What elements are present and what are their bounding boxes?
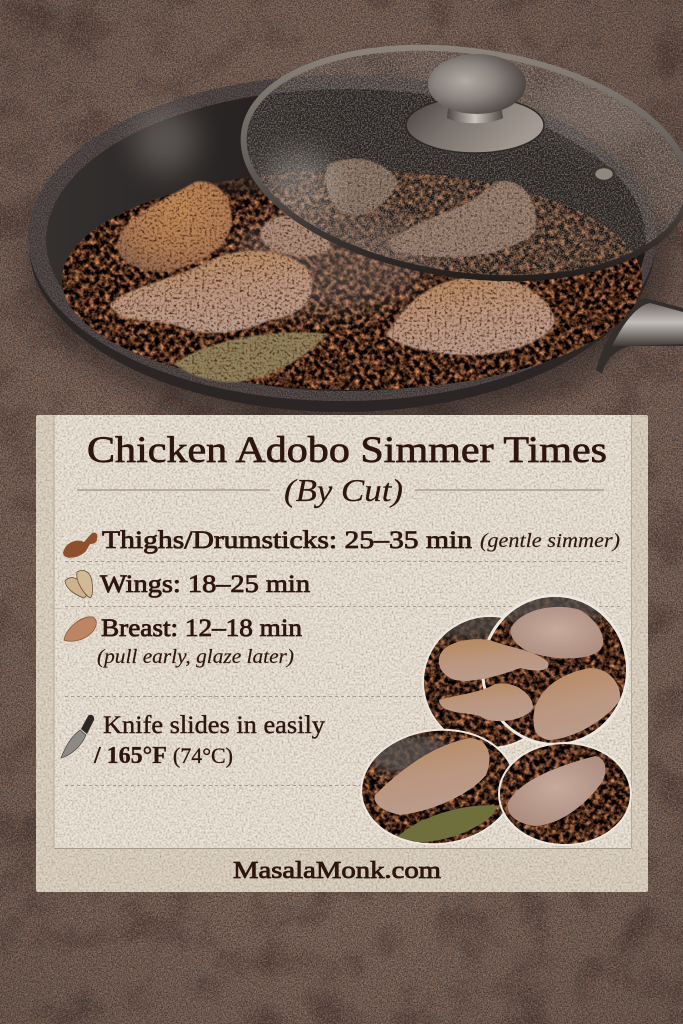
title: Chicken Adobo Simmer Times: [87, 430, 607, 471]
photo piece: upper thigh: [511, 607, 603, 658]
breast piece: [508, 756, 605, 826]
lid rim: [229, 21, 683, 305]
row: thighs and drumsticks: (gentle simmer): [480, 531, 620, 552]
pan handle: [596, 298, 683, 374]
card outer panel: [36, 415, 648, 892]
glass lid: [240, 44, 683, 282]
subtitle with rules: (By Cut): [284, 472, 403, 508]
row: doneness check: Knife slides in easily: [103, 712, 326, 739]
row: breast: [64, 613, 302, 668]
chicken drumstick centre left: [110, 251, 312, 333]
row: breast: (pull early, glaze later): [97, 647, 294, 668]
photo: drumstick and wing pieces: [439, 639, 620, 740]
row: thighs and drumsticks: Thighs/Drumsticks: 25–35 min: [102, 525, 472, 554]
large thigh: [533, 668, 620, 740]
icon: knife: [61, 715, 94, 758]
row: doneness check: [61, 712, 326, 769]
bay leaf: [396, 805, 498, 842]
website credit: MasalaMonk.com: [233, 858, 441, 884]
chicken under lid: [389, 181, 536, 257]
chicken thigh right: [386, 277, 555, 355]
lid knob cap: [428, 54, 526, 114]
lid knob base: [406, 97, 544, 153]
photo: bottom right oval: [498, 742, 632, 846]
frying pan: [28, 75, 683, 434]
row: doneness check: / 165°F (74°C): [93, 743, 233, 769]
recipe card: [36, 415, 648, 892]
roll of chicken: [375, 738, 489, 815]
card inner panel: [54, 415, 631, 848]
photo: left circle drumstick: [422, 615, 524, 748]
bay leaf: [174, 332, 328, 382]
lid vent: [594, 167, 614, 181]
row: thighs and drumsticks: [63, 525, 620, 558]
row: breast: Breast: 12–18 min: [101, 613, 302, 642]
chicken thigh left: [117, 181, 232, 272]
sauce surface: [60, 162, 650, 395]
chicken piece behind: [261, 216, 330, 256]
wing: [439, 683, 533, 721]
icon: chicken breast: [64, 617, 96, 641]
photo: bottom left oval: [360, 728, 511, 846]
lid knob neck: [447, 98, 503, 123]
photo: large circle chicken pieces: [481, 590, 629, 746]
row: wings: Wings: 18–25 min: [100, 569, 310, 598]
icon: drumstick: [63, 533, 97, 558]
drumstick: [439, 639, 549, 681]
icon: wings: [65, 570, 93, 598]
steam: [133, 106, 197, 174]
